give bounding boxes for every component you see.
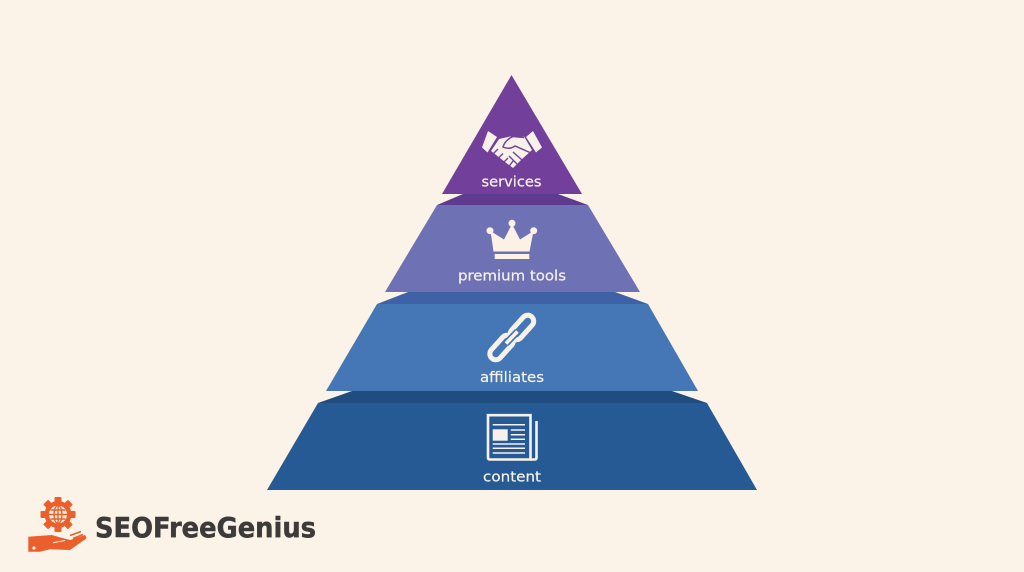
label: premium tools: premium tools xyxy=(458,269,566,285)
tier: services xyxy=(437,75,588,205)
icon: newspaper xyxy=(488,415,536,460)
icon: open hand xyxy=(28,532,87,552)
label: affiliates: affiliates xyxy=(480,370,544,386)
logo xyxy=(28,497,316,552)
tier: premium tools xyxy=(377,205,648,304)
icon: gear with globe xyxy=(40,497,76,532)
wordmark: SEOFreeGenius xyxy=(95,511,316,544)
icon: handshake xyxy=(482,131,542,168)
label: content: content xyxy=(483,470,542,486)
label: services: services xyxy=(482,175,542,191)
tier: affiliates xyxy=(318,304,707,403)
icon: crown xyxy=(486,220,537,259)
icon: chain link xyxy=(487,313,536,362)
tier: content xyxy=(267,403,757,490)
pyramid xyxy=(267,75,757,490)
